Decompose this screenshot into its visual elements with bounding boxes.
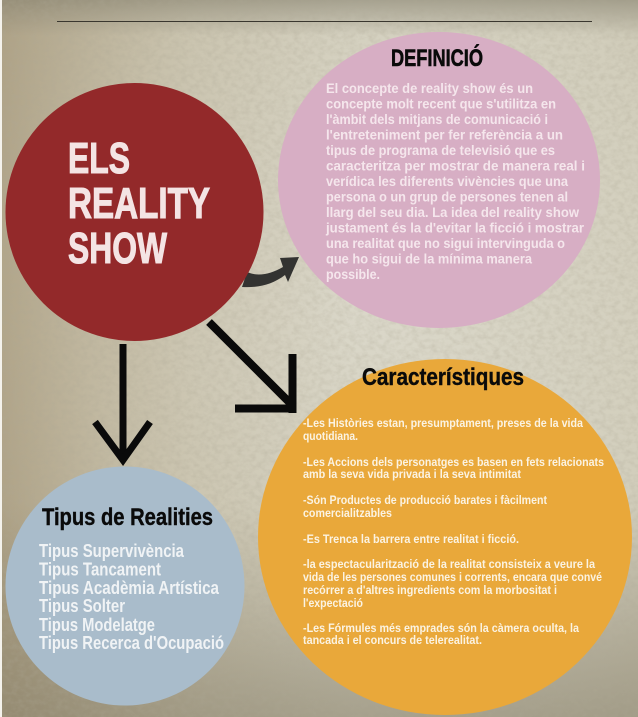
panel: characteristics	[258, 359, 632, 715]
characteristics list: -Són Productes de producció barates i fàcilment	[303, 493, 547, 507]
arrow: diagonal to characteristics	[209, 322, 296, 413]
characteristics list: -Les Fórmules més emprades són la càmera oculta, la	[303, 621, 579, 635]
characteristics list: tancada i el concurs de telerealitat.	[303, 633, 482, 647]
panel: definition	[278, 32, 600, 328]
types list: Tipus Solter	[39, 596, 125, 616]
definition text: possible.	[326, 266, 380, 282]
definition text: llarg del seu dia. La idea del reality show	[326, 204, 579, 220]
types list: Tipus Supervivència	[39, 541, 185, 561]
types list: Tipus Acadèmia Artística	[39, 578, 220, 598]
types list	[39, 541, 224, 653]
characteristics list: -la espectacularització de la realitat consisteix a veure la	[303, 557, 595, 571]
characteristics list	[303, 416, 604, 647]
definition heading: DEFINICIÓ	[391, 44, 483, 72]
types heading: Tipus de Realities	[42, 504, 213, 531]
characteristics list: -Es Trenca la barrera entre realitat i ficció.	[303, 532, 519, 546]
title: ELS	[68, 134, 130, 183]
definition text: persona o un grup de persones tenen al	[326, 188, 568, 204]
title: REALITY	[68, 179, 210, 228]
definition text: una realitat que no sigui intervinguda o	[326, 235, 565, 251]
types list: Tipus Modelatge	[39, 615, 155, 635]
arrow: curved arrow to definition	[242, 257, 299, 287]
characteristics list: -Les Històries estan, presumptament, preses de la vida	[303, 416, 583, 430]
types list: Tipus Tancament	[39, 560, 161, 580]
panel: types of reality shows	[6, 466, 244, 706]
definition text: que ho sigui de la mínima manera	[326, 250, 532, 266]
panel: main title circle	[6, 83, 264, 341]
characteristics list: amb la seva vida privada i la seva intimitat	[303, 467, 521, 481]
definition text: justament és la d'evitar la ficció i mostrar	[325, 220, 585, 236]
top rule	[57, 21, 592, 22]
definition text: caracteritza per mostrar de manera real i	[326, 158, 585, 174]
characteristics list: -Les Accions dels personatges es basen en fets relacionats	[303, 455, 604, 469]
title	[68, 134, 210, 273]
title: SHOW	[68, 224, 167, 273]
definition text: l'entreteniment per fer referència a un	[326, 126, 563, 142]
definition text: verídica les diferents vivències que una	[326, 173, 568, 189]
characteristics heading: Característiques	[362, 364, 524, 391]
characteristics list: l'expectació	[303, 596, 363, 610]
characteristics list: recórrer a d'altres ingredients com la morbositat i	[303, 583, 557, 597]
definition text: tipus de programa de televisió que es	[326, 142, 555, 158]
definition text: El concepte de reality show és un	[326, 80, 533, 96]
arrow: down to types of reality shows	[95, 344, 150, 460]
types list: Tipus Recerca d'Ocupació	[39, 633, 224, 653]
definition text: l'àmbit dels mitjans de comunicació i	[326, 111, 548, 127]
characteristics list: comercialitzables	[303, 506, 392, 520]
characteristics list: quotidiana.	[303, 429, 358, 443]
definition text	[325, 80, 585, 282]
definition text: concepte molt recent que s'utilitza en	[326, 96, 556, 112]
characteristics list: vida de les persones comunes i corrents, encara que convé	[303, 570, 602, 584]
